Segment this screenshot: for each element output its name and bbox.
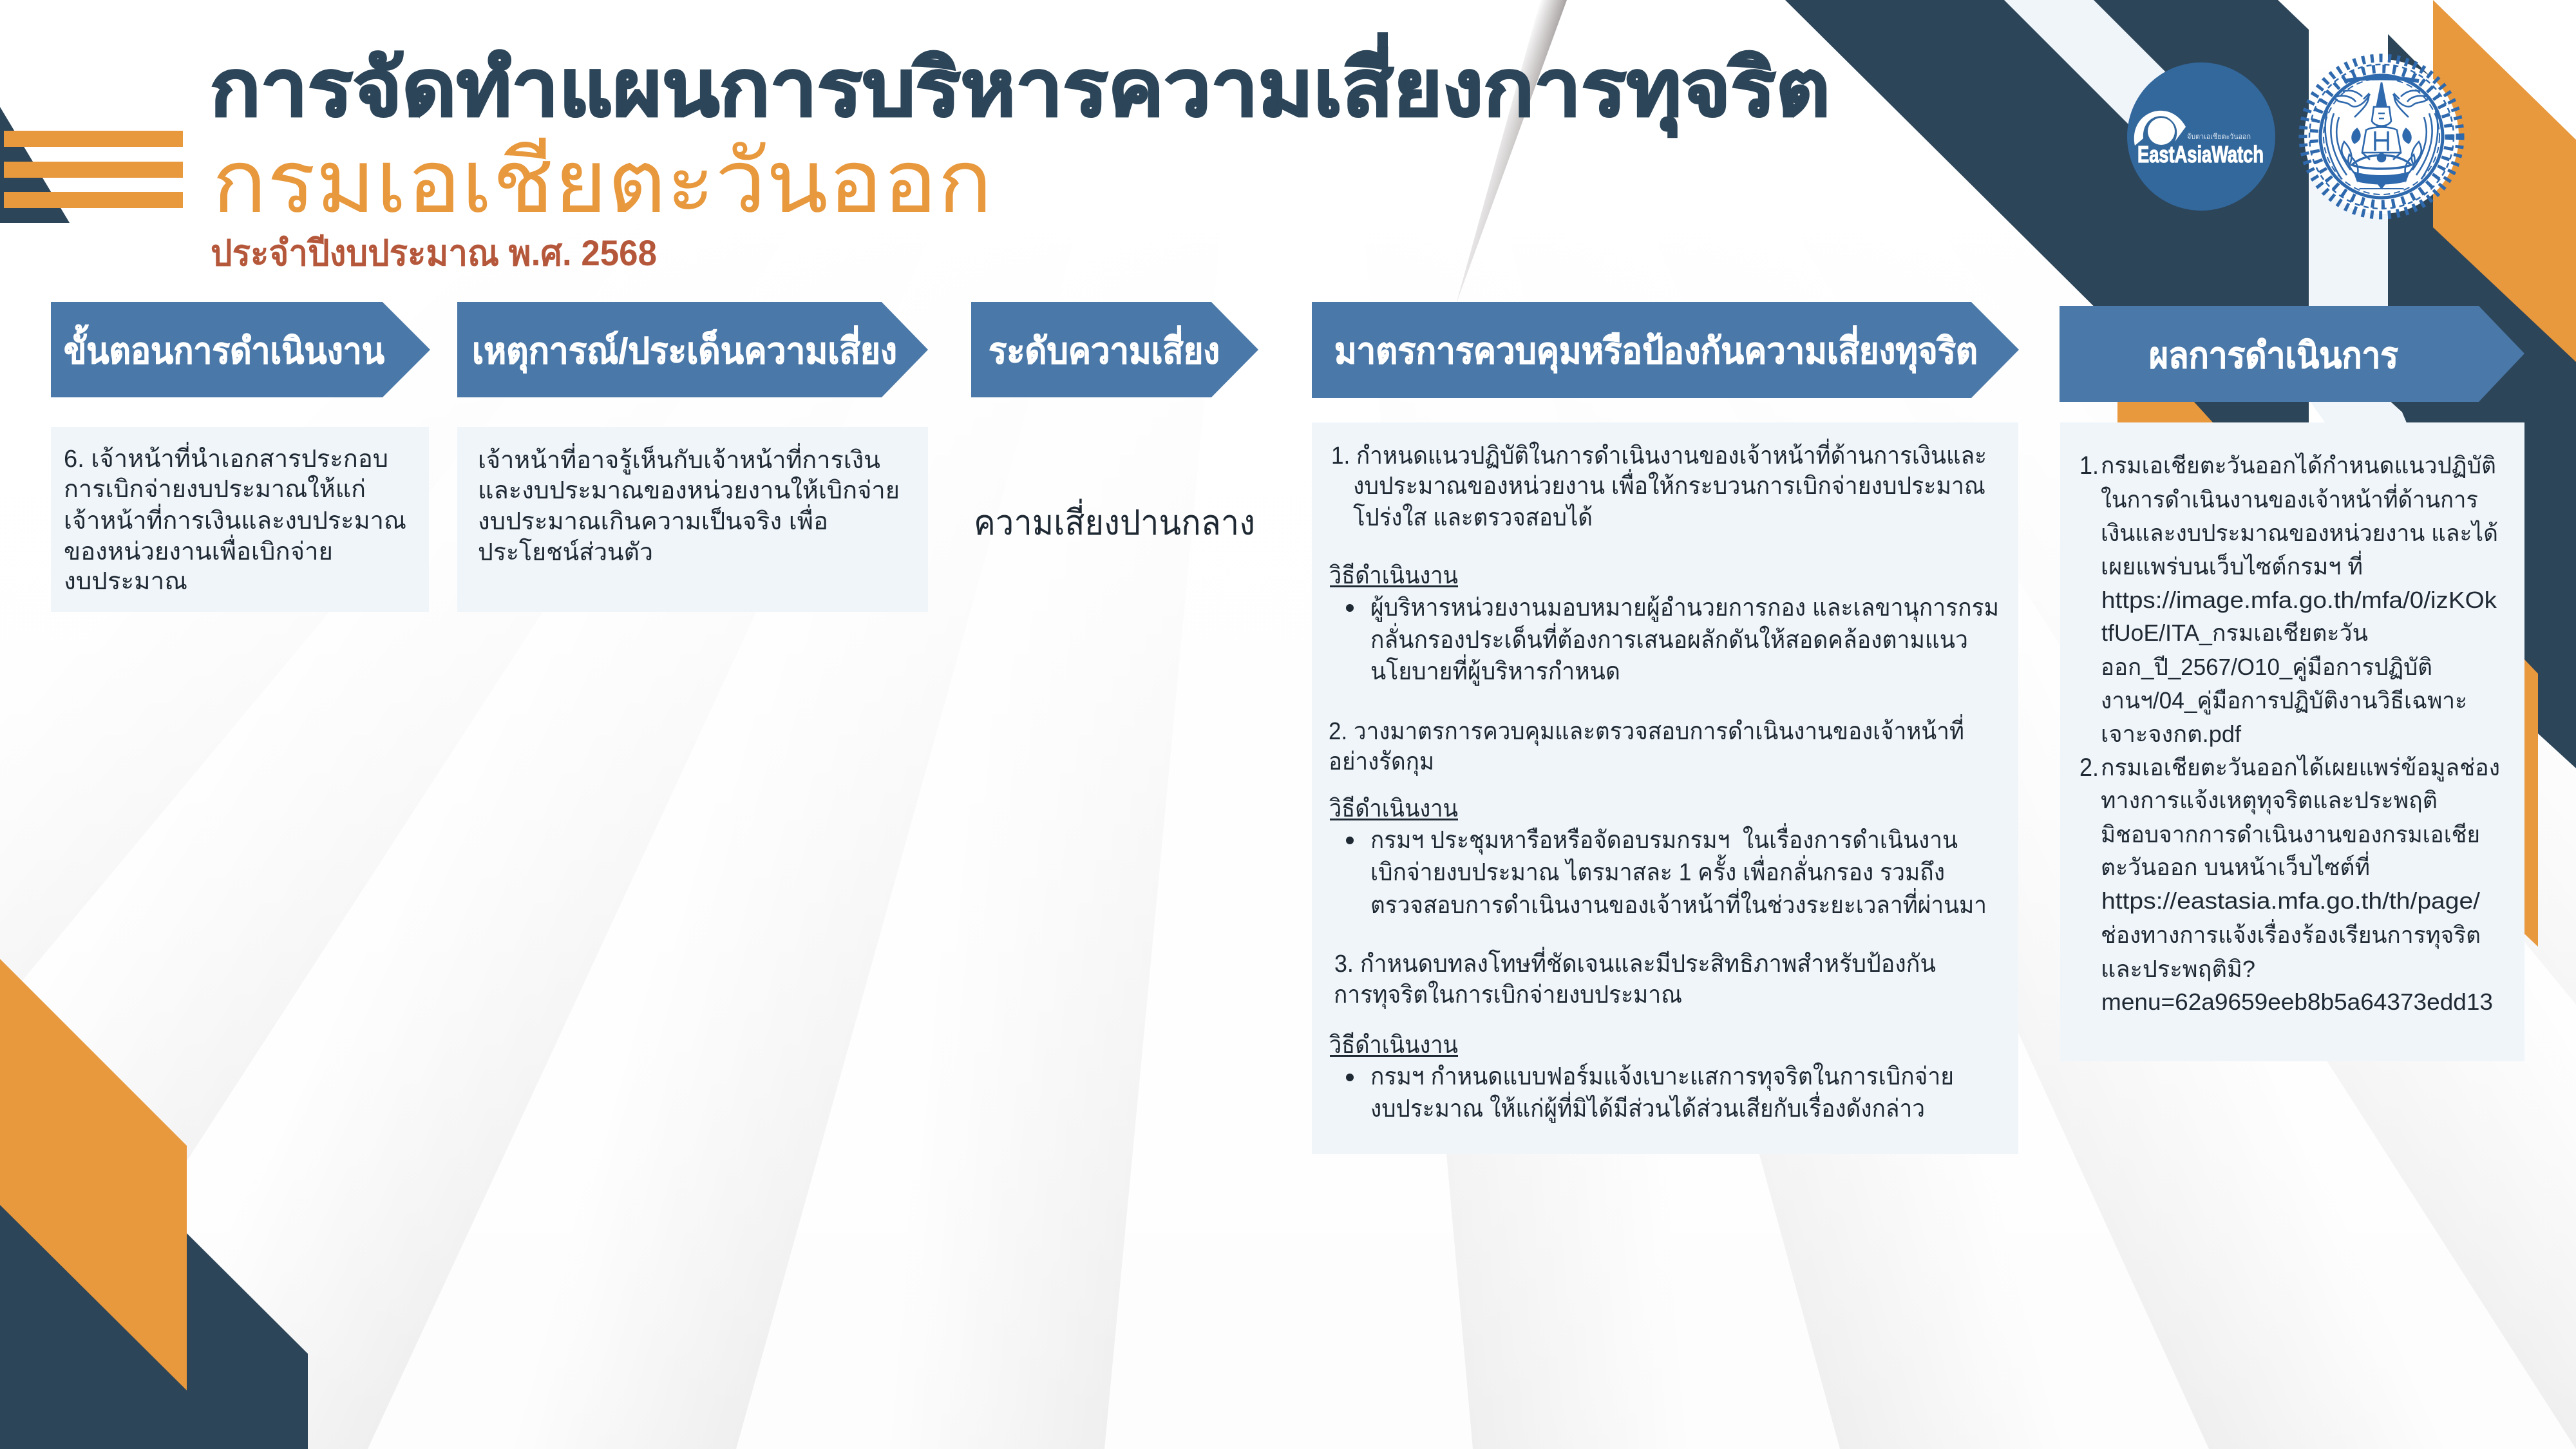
measure 2: อย่างรัดกุม (1329, 748, 1434, 776)
header arrow: process steps (51, 302, 430, 397)
result 2: และประพฤติมิ? (2101, 956, 2255, 982)
shape: bottom-left navy block (0, 1205, 308, 1449)
result 2: ช่องทางการแจ้งเรื่องร้องเรียนการทุจริต (2101, 919, 2481, 949)
result 1 (2079, 451, 2498, 747)
shape: right navy band (2388, 34, 2576, 768)
measure 2: 2. วางมาตรการควบคุมและตรวจสอบการดำเนินงานของเจ้าหน้าที่ (1329, 714, 1964, 746)
title: การจัดทำแผนการบริหารความเสี่ยงการทุจริต (210, 33, 1830, 137)
panel: process step text: 6. เจ้าหน้าที่นำเอกสารประกอบ (64, 442, 388, 473)
shape: bottom-left orange ribbon (0, 959, 187, 1390)
result 2: https://eastasia.mfa.go.th/th/page/ (2101, 887, 2480, 914)
result 1: งานฯ/04_คู่มือการปฏิบัติงานวิธีเฉพาะ (2101, 687, 2467, 715)
panel: process step text: การเบิกจ่ายงบประมาณให้แก่ (64, 475, 366, 503)
header arrow: risk events: เหตุการณ์/ประเด็นความเสี่ยง (472, 325, 897, 374)
method 1: ผู้บริหารหน่วยงานมอบหมายผู้อำนวยการกอง และเลขานุการกรม (1370, 594, 1999, 622)
result 2: ตะวันออก บนหน้าเว็บไซต์ที่ (2101, 851, 2370, 880)
subtitle: department: กรมเอเชียตะวันออก (212, 133, 992, 231)
result 2: มิชอบจากการดำเนินงานของกรมเอเชีย (2101, 821, 2480, 848)
panel: risk event text: เจ้าหน้าที่อาจรู้เห็นกับเจ้าหน้าที่การเงิน (478, 443, 880, 475)
panel: results (2060, 422, 2524, 1061)
result 2: กรมเอเชียตะวันออกได้เผยแพร่ข้อมูลช่อง (2101, 754, 2500, 782)
header arrow: results: ผลการดำเนินการ (2149, 335, 2398, 375)
method 1 (1329, 562, 1999, 686)
logo: ministry seal (2303, 58, 2460, 215)
measure 3 (1334, 947, 1936, 1009)
method 2: วิธีดำเนินงาน (1329, 795, 1458, 822)
panel: process step text: เจ้าหน้าที่การเงินและงบประมาณ (64, 504, 406, 535)
result 1: https://image.mfa.go.th/mfa/0/izKOk (2101, 587, 2497, 613)
panel: process step text: งบประมาณ (64, 568, 187, 595)
measure 3: การทุจริตในการเบิกจ่ายงบประมาณ (1334, 981, 1682, 1009)
header arrow: control measures (1312, 302, 2019, 398)
header arrow: process steps: ขั้นตอนการดำเนินงาน (64, 325, 384, 371)
result 2: menu=62a9659eeb8b5a64373edd13 (2101, 989, 2493, 1015)
method 1: กลั่นกรองประเด็นที่ต้องการเสนอผลักดันให้สอดคล้องตามแนว (1370, 623, 1968, 654)
shape: light vertical strip (2309, 30, 2447, 459)
panel: risk event text: งบประมาณเกินความเป็นจริง เพื่อ (478, 504, 828, 535)
result 2: ทางการแจ้งเหตุทุจริตและประพฤติ (2101, 787, 2438, 815)
shape: top-right light diagonal band (2004, 0, 2190, 155)
result 1: เจาะจงกต.pdf (2101, 721, 2242, 747)
shape: top-left orange bars (4, 131, 183, 208)
method 2: กรมฯ ประชุมหารือหรือจัดอบรมกรมฯ ในเรื่องการดำเนินงาน (1370, 823, 1958, 855)
method 2: ตรวจสอบการดำเนินงานของเจ้าหน้าที่ในช่วงระยะเวลาที่ผ่านมา (1370, 888, 1987, 919)
panel: control measures (1312, 422, 2018, 1154)
measure 1: 1. กำหนดแนวปฏิบัติในการดำเนินงานของเจ้าหน้าที่ด้านการเงินและ (1331, 439, 1987, 469)
method 3: วิธีดำเนินงาน (1329, 1032, 1458, 1059)
measure 1: งบประมาณของหน่วยงาน เพื่อให้กระบวนการเบิกจ่ายงบประมาณ (1353, 469, 1985, 500)
method 1: นโยบายที่ผู้บริหารกำหนด (1370, 654, 1620, 686)
result 2 (2079, 753, 2500, 1015)
header arrow: results (2060, 306, 2524, 402)
method 3 (1329, 1032, 1954, 1123)
shape: orange ribbon behind results panel (2117, 386, 2538, 947)
seal left ornament (2325, 91, 2370, 179)
measure 2 (1329, 714, 1964, 776)
header arrow: control measures: มาตรการควบคุมหรือป้องกันความเสี่ยงทุจริต (1334, 325, 1978, 374)
result 1: ในการดำเนินงานของเจ้าหน้าที่ด้านการ (2101, 484, 2478, 513)
header arrow: risk events (457, 302, 928, 397)
result 1: เงินและงบประมาณของหน่วยงาน และได้ (2101, 520, 2498, 546)
panel: risk event text: และงบประมาณของหน่วยงานให้เบิกจ่าย (478, 477, 900, 504)
logo: EastAsiaWatch circle: EastAsiaWatch (2137, 141, 2264, 167)
result 1: กรมเอเชียตะวันออกได้กำหนดแนวปฏิบัติ (2101, 452, 2496, 478)
panel: risk event text: ประโยชน์ส่วนตัว (478, 538, 653, 566)
panel: risk event text (457, 427, 928, 612)
shape: top-left navy triangle (0, 107, 70, 223)
logo: EastAsiaWatch circle (2127, 62, 2275, 211)
result 1: 1. (2079, 451, 2099, 480)
logo: EastAsiaWatch circle: จับตาเอเชียตะวันออก (2187, 132, 2251, 141)
method 3: งบประมาณ ให้แก่ผู้ที่มิได้มีส่วนได้ส่วนเสียกับเรื่องดังกล่าว (1370, 1092, 1925, 1123)
result 2: 2. (2079, 753, 2099, 782)
text: risk level value: ความเสี่ยงปานกลาง (974, 498, 1255, 542)
seal figure (2325, 79, 2438, 189)
method 2 (1329, 795, 1987, 919)
panel: process step text (51, 427, 429, 612)
header arrow: risk level (971, 302, 1258, 397)
method 3: กรมฯ กำหนดแบบฟอร์มแจ้งเบาะแสการทุจริตในการเบิกจ่าย (1370, 1063, 1954, 1091)
method 2: เบิกจ่ายงบประมาณ ไตรมาสละ 1 ครั้ง เพื่อกลั่นกรอง รวมถึง (1370, 854, 1945, 886)
header arrow: risk level: ระดับความเสี่ยง (989, 325, 1220, 371)
measure 3: 3. กำหนดบทลงโทษที่ชัดเจนและมีประสิทธิภาพสำหรับป้องกัน (1334, 947, 1936, 978)
measure 1 (1331, 439, 1987, 531)
result 1: ออก_ปี_2567/O10_คู่มือการปฏิบัติ (2101, 654, 2432, 681)
result 1: เผยแพร่บนเว็บไซต์กรมฯ ที่ (2101, 551, 2363, 580)
subtitle: fiscal year: ประจำปีงบประมาณ พ.ศ. 2568 (211, 232, 657, 273)
result 1: tfUoE/ITA_กรมเอเชียตะวัน (2101, 620, 2368, 646)
seal right ornament (2393, 91, 2438, 179)
measure 1: โปร่งใส และตรวจสอบได้ (1353, 503, 1593, 531)
panel: process step text: ของหน่วยงานเพื่อเบิกจ่าย (64, 535, 333, 565)
shape: right orange ribbon (2433, 0, 2576, 362)
shape: top-right navy band (1785, 0, 2309, 425)
method 1: วิธีดำเนินงาน (1329, 562, 1458, 589)
